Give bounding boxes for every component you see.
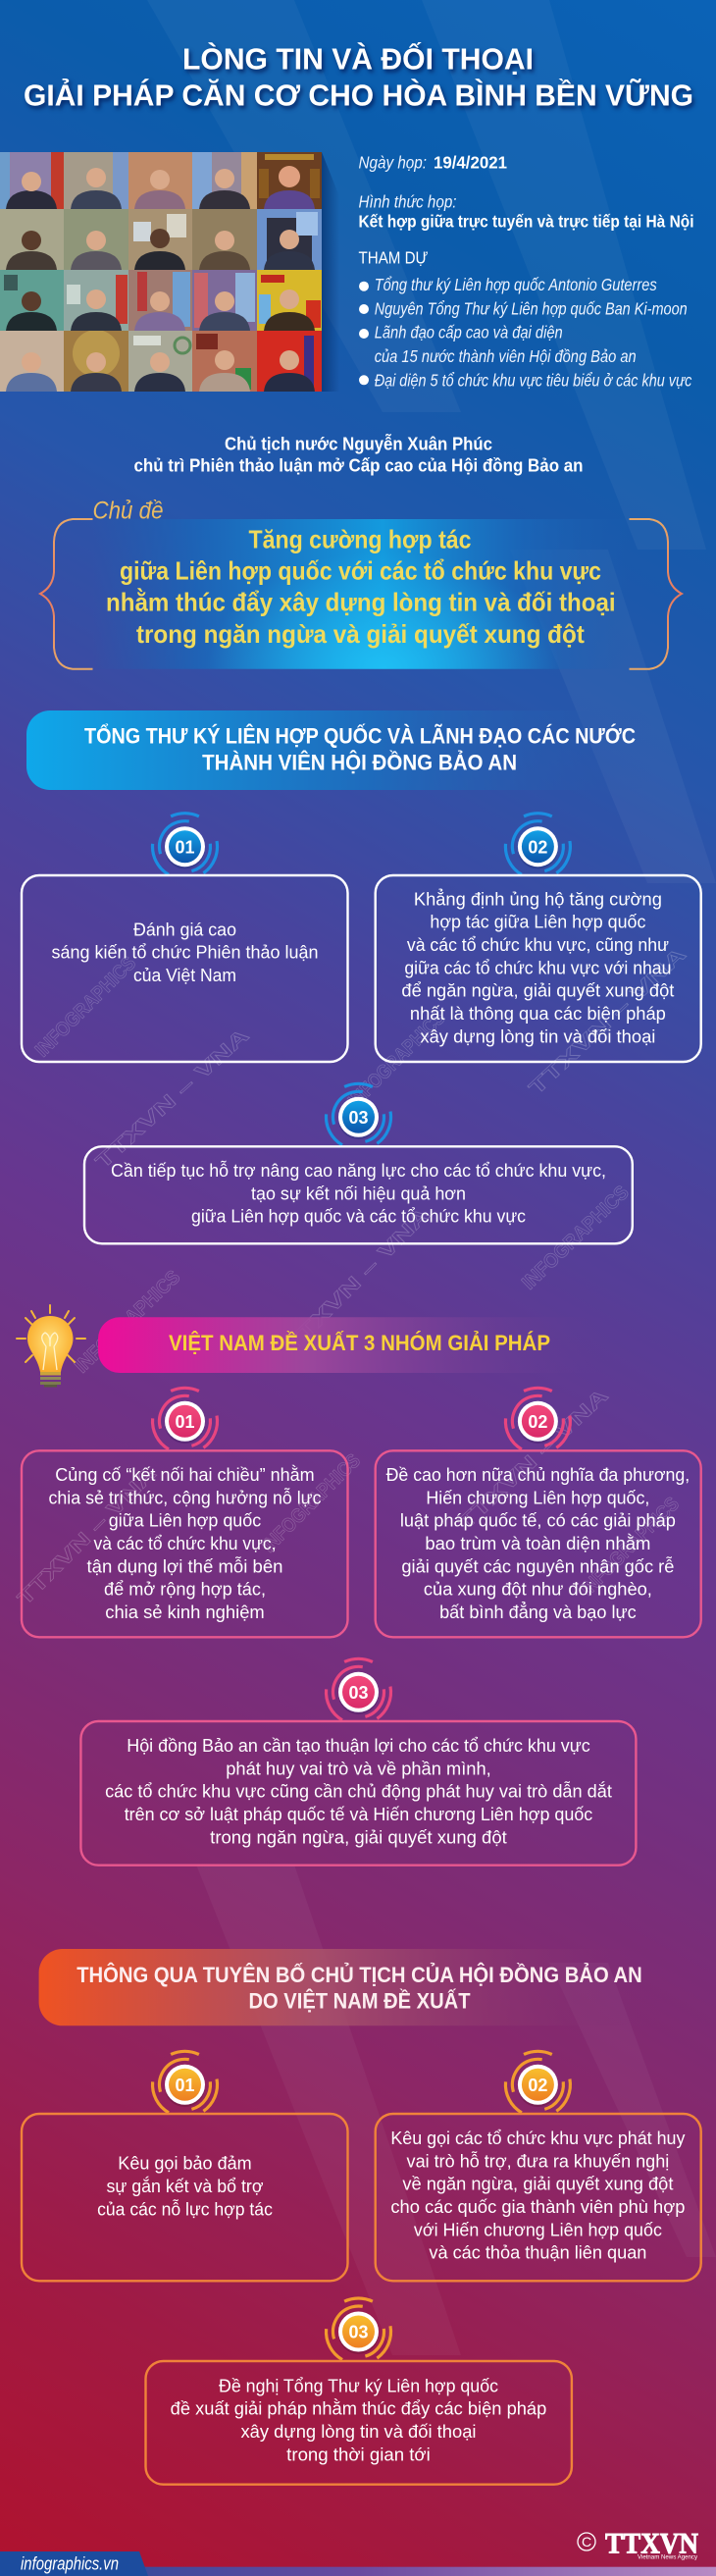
panel: topic — [40, 497, 682, 669]
panel: topic: trong ngăn ngừa và giải quyết xung đột — [136, 619, 585, 649]
panel: pink box 02: bao trùm và toàn diện nhằm — [425, 1533, 650, 1553]
badge: orange 02 — [493, 2040, 583, 2129]
panel: pink box 01: chia sẻ kinh nghiệm — [105, 1603, 265, 1622]
logo: TTXVN: TTXVN — [605, 2528, 698, 2560]
photo: video conference grid — [0, 152, 339, 392]
panel: orange box 01: của các nỗ lực hợp tác — [97, 2198, 273, 2219]
panel: blue box 01 — [22, 875, 347, 1062]
meeting information: Tổng thư ký Liên hợp quốc Antonio Guterres — [375, 275, 657, 294]
heading: section 1: TỔNG THƯ KÝ LIÊN HỢP QUỐC VÀ LÃNH ĐẠO CÁC NƯỚC — [84, 722, 636, 748]
logo: TTXVN: Vietnam News Agency — [638, 2555, 697, 2561]
meeting information: THAM DỰ — [359, 247, 429, 267]
badge: blue 01: 01 — [175, 836, 194, 858]
panel: blue box 02: Khẳng định ủng hộ tăng cường — [414, 888, 662, 909]
panel: blue box 02: nhất là thông qua các biện pháp — [410, 1004, 666, 1024]
title: GIẢI PHÁP CĂN CƠ CHO HÒA BÌNH BỀN VỮNG — [24, 77, 693, 112]
watermarks: TTXVN – VNA — [14, 1463, 161, 1610]
chair text: chủ trì Phiên thảo luận mở Cấp cao của Hội đồng Bảo an — [133, 456, 583, 476]
badge: pink 02: 02 — [528, 1411, 547, 1432]
watermarks: TTXVN – VNA — [281, 1204, 435, 1358]
panel: topic: giữa Liên hợp quốc với các tổ chức khu vực — [120, 556, 601, 586]
panel: topic: Chủ đề — [92, 497, 163, 524]
heading: section 1: THÀNH VIÊN HỘI ĐỒNG BẢO AN — [202, 750, 517, 774]
panel: blue box 03: tạo sự kết nối hiệu quả hơn — [251, 1183, 466, 1203]
badge: pink 01: 01 — [175, 1411, 194, 1432]
chair text: Chủ tịch nước Nguyễn Xuân Phúc — [225, 433, 492, 453]
badge: orange 03: 03 — [349, 2322, 369, 2342]
title: LÒNG TIN VÀ ĐỐI THOẠI — [182, 41, 534, 77]
panel: pink box 03 — [80, 1721, 636, 1866]
badge: blue 03: 03 — [349, 1107, 369, 1128]
panel: pink box 02: của xung đột như đói nghèo, — [424, 1580, 652, 1600]
chair text — [133, 433, 583, 476]
badge: orange 02: 02 — [528, 2075, 547, 2095]
watermarks: INFOGRAPHICS — [71, 1267, 184, 1378]
panel: orange box 03: xây dựng lòng tin và đối thoại — [241, 2422, 477, 2442]
panel: blue box 02: và các tổ chức khu vực, cũng như — [407, 935, 669, 955]
badge: blue 02 — [493, 803, 583, 891]
badge: orange 03 — [314, 2287, 403, 2376]
meeting information: Lãnh đạo cấp cao và đại diện — [375, 322, 563, 342]
heading: section 3: THÔNG QUA TUYÊN BỐ CHỦ TỊCH CỦA HỘI ĐỒNG BẢO AN — [77, 1962, 642, 1987]
watermarks: INFOGRAPHICS — [577, 1494, 684, 1601]
watermarks: INFOGRAPHICS — [31, 953, 140, 1062]
panel: blue box 02: để ngăn ngừa, giải quyết xung đột — [401, 981, 674, 1001]
meeting information: của 15 nước thành viên Hội đồng Bảo an — [375, 346, 637, 366]
panel: pink box 01: tận dụng lợi thế mỗi bên — [86, 1555, 282, 1576]
watermarks — [14, 943, 690, 1610]
panel: orange box 02 — [376, 2114, 701, 2281]
panel: pink box 02: Đề cao hơn nữa chủ nghĩa đa phương, — [386, 1465, 690, 1485]
panel: orange box 02: Kêu gọi các tổ chức khu vực phát huy — [390, 2129, 685, 2148]
logo: TTXVN: C — [582, 2534, 591, 2550]
footer bar — [0, 2551, 716, 2576]
panel: blue box 02: hợp tác giữa Liên hợp quốc — [430, 913, 645, 932]
panel: orange box 03: Đề nghị Tổng Thư ký Liên hợp quốc — [219, 2376, 498, 2395]
heading: section 1 — [26, 710, 654, 790]
panel: pink box 03: trong ngăn ngừa, giải quyết xung đột — [210, 1827, 507, 1847]
watermarks: TTXVN – VNA — [454, 1385, 613, 1535]
badge: blue 02: 02 — [528, 836, 547, 858]
panel: pink box 01: để mở rộng hợp tác, — [104, 1580, 266, 1600]
panel: blue box 02: giữa các tổ chức khu vực với nhau — [404, 958, 671, 977]
panel: orange box 01: Kêu gọi bảo đảm — [118, 2154, 252, 2174]
panel: blue box 01: của Việt Nam — [133, 966, 236, 985]
badge: blue 01 — [140, 803, 230, 891]
meeting information: 19/4/2021 — [434, 153, 507, 173]
watermarks: TTXVN – VNA — [92, 1025, 253, 1174]
heading: section 3 — [39, 1949, 667, 2025]
badge: orange 01 — [140, 2040, 230, 2129]
panel: pink box 02: Hiến chương Liên hợp quốc, — [426, 1488, 649, 1507]
panel: pink box 03: phát huy vai trò và về phần mình, — [226, 1759, 491, 1778]
panel: orange box 02: và các thỏa thuận liên quan — [429, 2243, 646, 2263]
panel: pink box 02: luật pháp quốc tế, có các giải pháp — [400, 1511, 676, 1531]
panel: pink box 01: giữa Liên hợp quốc — [109, 1511, 261, 1531]
badge: pink 02 — [493, 1377, 583, 1465]
panel: orange box 03 — [145, 2361, 572, 2485]
panel: orange box 01: sự gắn kết và bổ trợ — [106, 2176, 264, 2196]
meeting information: Hình thức họp: — [359, 192, 457, 212]
panel: blue box 01: Đánh giá cao — [133, 920, 236, 939]
badge: pink 03 — [314, 1648, 403, 1736]
panel: blue box 01: sáng kiến tổ chức Phiên thảo luận — [51, 943, 318, 963]
panel: pink box 01: và các tổ chức khu vực, — [94, 1534, 277, 1553]
panel: pink box 02: giải quyết các nguyên nhân gốc rễ — [401, 1555, 674, 1576]
badge: orange 01: 01 — [175, 2075, 194, 2095]
heading: section 2 — [98, 1317, 618, 1373]
panel: pink box 01: Củng cố “kết nối hai chiều” nhằm — [55, 1464, 315, 1485]
badge: pink 01 — [140, 1377, 230, 1465]
watermarks: INFOGRAPHICS — [258, 1450, 365, 1557]
panel: orange box 02: cho các quốc gia thành viên phù hợp — [390, 2197, 685, 2217]
panel: blue box 02: xây dựng lòng tin và đối thoại — [420, 1026, 655, 1046]
panel: blue box 02 — [376, 875, 701, 1062]
panel: orange box 03: trong thời gian tới — [286, 2445, 431, 2464]
panel: pink box 02 — [376, 1450, 701, 1637]
panel: pink box 03: các tổ chức khu vực cũng cần chủ động phát huy vai trò dẫn dắt — [105, 1781, 612, 1802]
watermarks: TTXVN – VNA — [525, 943, 690, 1100]
badge: pink 03: 03 — [349, 1682, 369, 1703]
meeting information: Ngày họp: — [359, 153, 427, 173]
heading: section 2: VIỆT NAM ĐỀ XUẤT 3 NHÓM GIẢI PHÁP — [169, 1331, 550, 1355]
panel: orange box 03: đề xuất giải pháp nhằm thúc đẩy các biện pháp — [171, 2398, 546, 2419]
panel: pink box 01 — [22, 1450, 347, 1637]
panel: blue box 03: Cần tiếp tục hỗ trợ nâng cao năng lực cho các tổ chức khu vực, — [111, 1160, 606, 1181]
badge: blue 03 — [314, 1073, 403, 1161]
panel: pink box 02: bất bình đẳng và bạo lực — [439, 1602, 637, 1622]
meeting information — [359, 153, 694, 390]
panel: orange box 02: vai trò hỗ trợ, đưa ra khuyến nghị — [407, 2150, 669, 2171]
icon: light bulb — [17, 1305, 85, 1388]
panel: blue box 03: giữa Liên hợp quốc và các tổ chức khu vực — [191, 1207, 526, 1227]
panel: blue box 03 — [84, 1146, 633, 1243]
footer bar: infographics.vn — [21, 2553, 119, 2573]
panel: topic: Tăng cường hợp tác — [249, 524, 471, 553]
title — [24, 41, 693, 112]
watermarks: INFOGRAPHICS — [518, 1182, 634, 1294]
panel: pink box 03: Hội đồng Bảo an cần tạo thuận lợi cho các tổ chức khu vực — [127, 1736, 590, 1756]
watermarks: INFOGRAPHICS — [344, 1007, 449, 1113]
panel: pink box 03: trên cơ sở luật pháp quốc tế và Hiến chương Liên hợp quốc — [125, 1805, 592, 1824]
panel: pink box 01: chia sẻ tri thức, cộng hưởng nỗ lực — [49, 1487, 322, 1507]
panel: orange box 02: với Hiến chương Liên hợp quốc — [414, 2220, 662, 2239]
panel: topic: nhằm thúc đẩy xây dựng lòng tin và đối thoại — [106, 588, 616, 617]
panel: orange box 02: về ngăn ngừa, giải quyết xung đột — [402, 2175, 673, 2194]
panel: orange box 01 — [22, 2114, 347, 2281]
heading: section 3: DO VIỆT NAM ĐỀ XUẤT — [249, 1989, 471, 2014]
